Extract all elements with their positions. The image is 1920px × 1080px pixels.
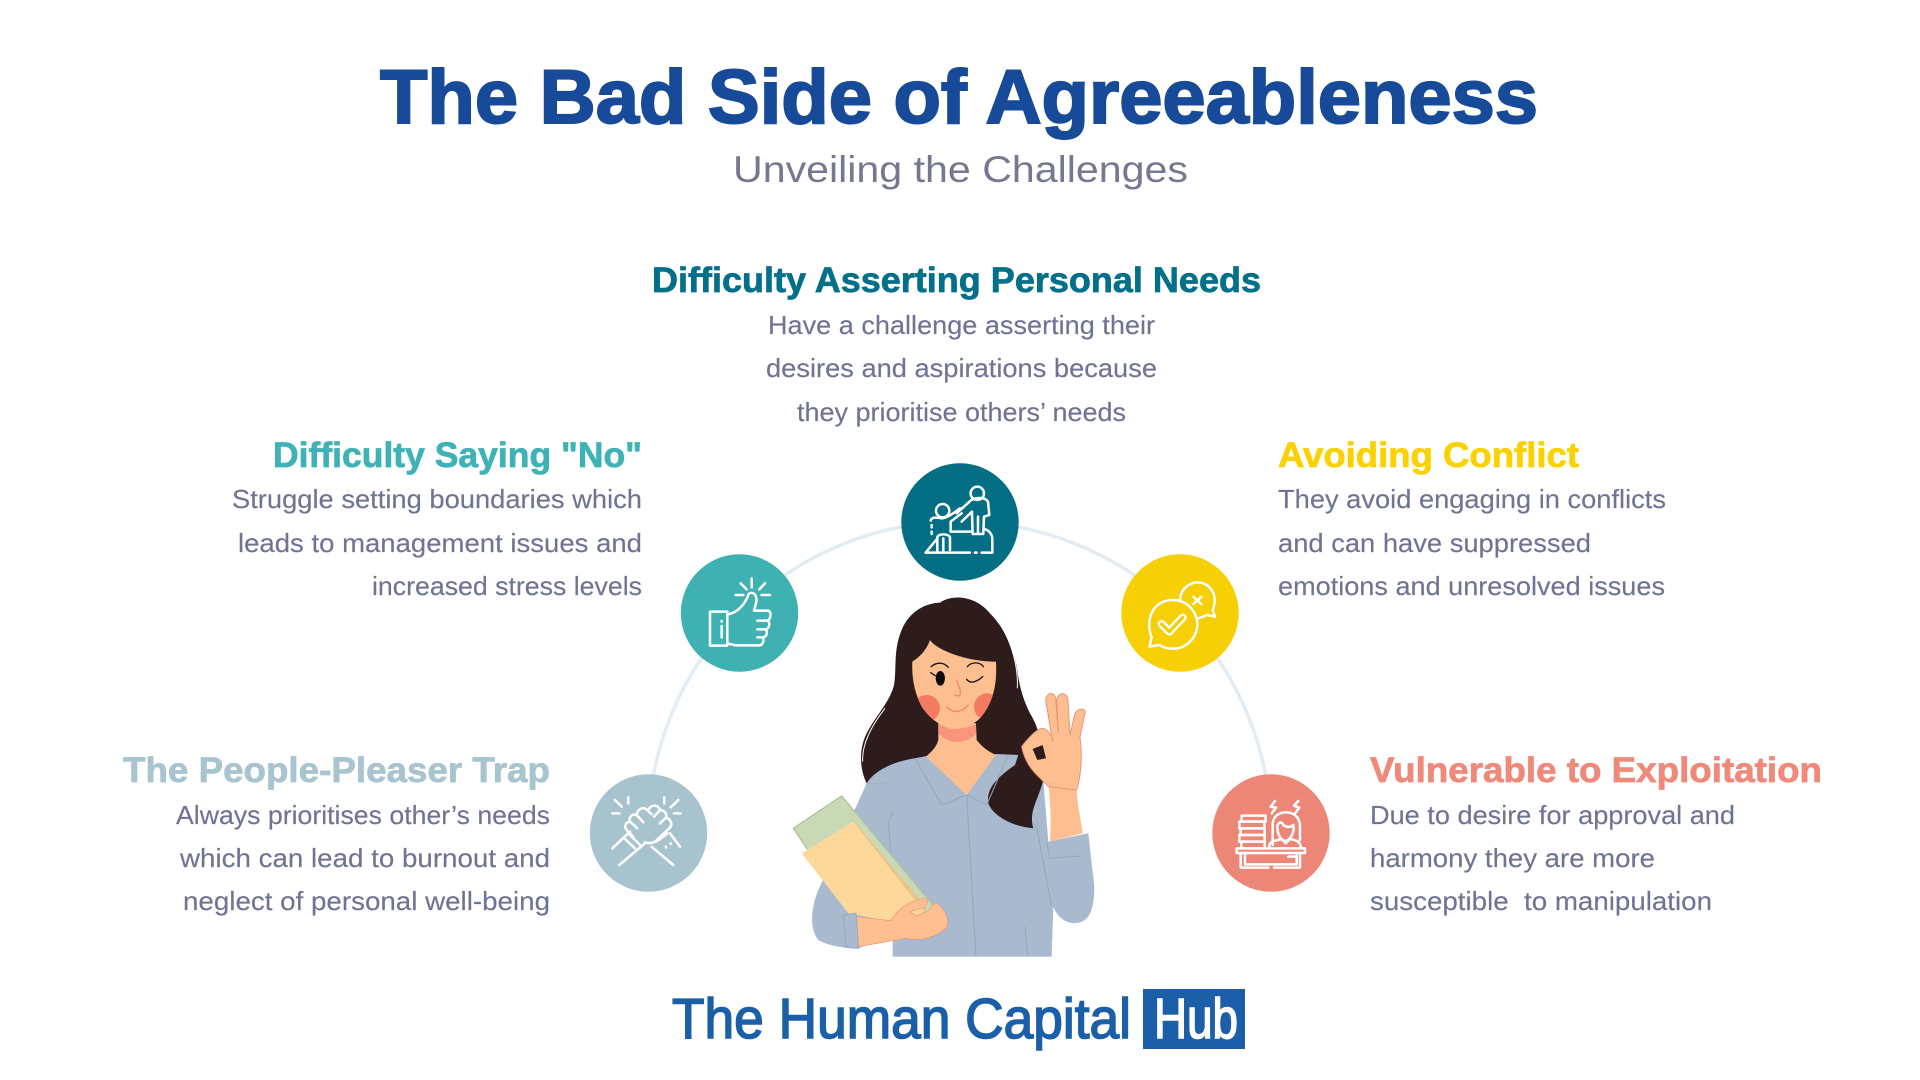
heading: vulnerable: Vulnerable to Exploitation bbox=[1370, 751, 1822, 790]
title: The Bad Side of Agreeableness bbox=[380, 55, 1538, 140]
ok hand hole bbox=[1033, 745, 1046, 760]
back folder bbox=[793, 796, 933, 918]
front folder bbox=[802, 822, 927, 922]
panel: vulnerable to exploitation bbox=[1370, 751, 1822, 916]
body text: people-pleaser: Always prioritises other’s needs bbox=[176, 800, 550, 830]
body text: vulnerable: harmony they are more bbox=[1370, 843, 1655, 873]
logo hub: Hub bbox=[1154, 987, 1238, 1051]
left sleeve bbox=[812, 783, 900, 948]
neck and chest bbox=[926, 723, 996, 795]
body text: vulnerable bbox=[1370, 800, 1735, 916]
shirt body and right sleeve bbox=[867, 754, 1094, 957]
heading: saying no: Difficulty Saying "No" bbox=[273, 436, 642, 475]
hair highlights bbox=[863, 627, 1017, 762]
folder edge bbox=[853, 820, 927, 917]
body text: difficulty asserting: Have a challenge asserting their bbox=[768, 310, 1155, 340]
panel: avoiding conflict bbox=[1278, 436, 1666, 601]
raised arm bbox=[1048, 783, 1083, 842]
illustration: winking woman with folders bbox=[793, 598, 1094, 957]
body text: people-pleaser: neglect of personal well-being bbox=[183, 886, 550, 916]
facial features bbox=[931, 663, 983, 711]
panel: difficulty asserting personal needs bbox=[652, 261, 1261, 427]
body text: saying no bbox=[232, 484, 642, 601]
body text: avoiding conflict bbox=[1278, 484, 1666, 601]
body text: vulnerable: susceptible to manipulation bbox=[1370, 886, 1712, 916]
icon: helping hand climb bbox=[901, 463, 1019, 581]
heading: avoiding conflict: Avoiding Conflict bbox=[1278, 436, 1579, 475]
body text: difficulty asserting: desires and aspirations because bbox=[766, 353, 1157, 383]
body text: difficulty asserting bbox=[766, 310, 1157, 427]
neck shadow bbox=[938, 724, 976, 742]
body text: people-pleaser: which can lead to burnout and bbox=[179, 843, 550, 873]
subtitle: Unveiling the Challenges bbox=[733, 149, 1188, 190]
front hair lock bbox=[988, 750, 1043, 828]
body text: avoiding conflict: They avoid engaging in conflicts bbox=[1278, 484, 1666, 514]
body text: avoiding conflict: emotions and unresolved issues bbox=[1278, 571, 1665, 601]
connecting arc bbox=[648, 522, 1271, 833]
body text: avoiding conflict: and can have suppressed bbox=[1278, 528, 1591, 558]
panel: people-pleaser trap bbox=[123, 751, 550, 916]
icon: clasped hands bbox=[590, 774, 707, 892]
holding hand bbox=[856, 898, 948, 947]
body text: saying no: leads to management issues and bbox=[238, 528, 642, 558]
body text: difficulty asserting: they prioritise others’ needs bbox=[797, 397, 1126, 427]
sleeve cuff bbox=[843, 913, 859, 948]
logo box bbox=[1143, 989, 1245, 1049]
hair bbox=[861, 598, 1043, 783]
logo bbox=[672, 987, 1245, 1051]
icon: chat bubbles check and cross bbox=[1121, 554, 1239, 672]
body text: saying no: increased stress levels bbox=[372, 571, 642, 601]
logo wordmark: The Human Capital bbox=[672, 987, 1131, 1051]
heading: people-pleaser: The People-Pleaser Trap bbox=[123, 751, 550, 790]
body text: saying no: Struggle setting boundaries which bbox=[232, 484, 642, 514]
face bbox=[912, 640, 996, 729]
icon: thumbs up bbox=[681, 554, 798, 672]
heading: difficulty asserting: Difficulty Asserting Personal Needs bbox=[652, 261, 1261, 300]
body text: people-pleaser bbox=[176, 800, 550, 916]
panel: difficulty saying no bbox=[232, 436, 642, 601]
shirt details bbox=[846, 755, 1080, 957]
ok hand gesture bbox=[1022, 693, 1085, 790]
blush bbox=[918, 693, 993, 720]
icon: woman at desk with book stack bbox=[1212, 774, 1330, 892]
body text: vulnerable: Due to desire for approval and bbox=[1370, 800, 1735, 830]
